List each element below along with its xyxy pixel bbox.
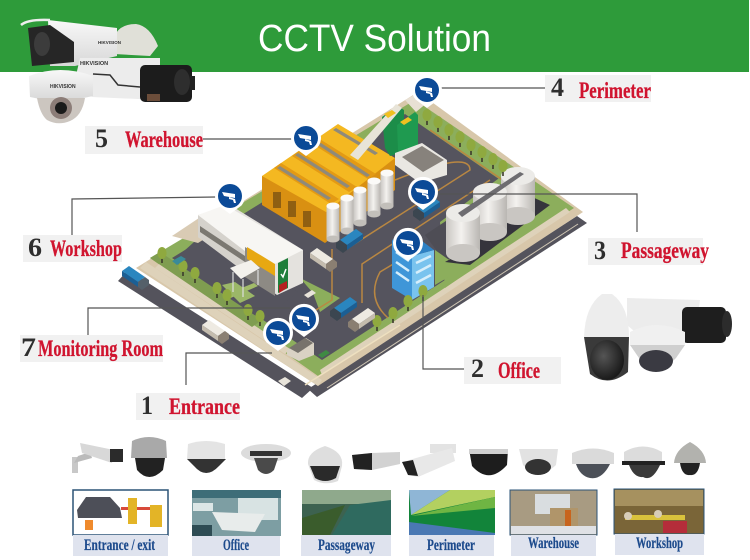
label: 4 perimeter [545, 73, 651, 103]
map pin: warehouse [291, 123, 321, 156]
box camera [75, 58, 195, 102]
scenario card: workshop [614, 489, 704, 555]
perimeter trees [157, 109, 508, 331]
label: 6 workshop: 6 [28, 233, 42, 262]
label: 6 workshop [23, 233, 122, 262]
photo [409, 490, 495, 535]
caption: Warehouse [528, 535, 579, 552]
title: CCTV Solution [258, 18, 491, 60]
label: 4 perimeter: Perimeter [579, 78, 651, 103]
camera 1 [72, 443, 123, 473]
camera 5 [308, 446, 342, 483]
map pin: passageway [408, 177, 438, 210]
scenario card: passageway [301, 490, 391, 556]
photo [73, 490, 168, 535]
PTZ camera [584, 294, 629, 381]
leader line: perimeter [441, 87, 545, 89]
box camera [627, 298, 732, 343]
leader line: warehouse [203, 138, 295, 140]
dome camera [29, 70, 93, 123]
bracket mount [114, 24, 158, 56]
gatehouse [287, 338, 314, 361]
photo [510, 490, 597, 535]
office tower [392, 232, 434, 300]
outer roads [118, 92, 587, 398]
camera 7 [402, 444, 456, 477]
label: 5 warehouse: Warehouse [125, 127, 203, 152]
utility building [395, 143, 447, 183]
header banner [0, 0, 749, 72]
map pin: entrance [263, 318, 293, 351]
label: 2 office: Office [498, 358, 540, 383]
silos [326, 170, 394, 242]
label: 1 entrance: Entrance [169, 394, 240, 419]
leader line: passageway [435, 194, 637, 232]
leader line: workshop [72, 197, 216, 235]
leader line: office [423, 295, 464, 369]
dome camera [630, 325, 685, 372]
workshop building [198, 205, 303, 296]
label: 5 warehouse: 5 [95, 124, 108, 153]
label: 7 monitoring room: Monitoring Room [38, 336, 163, 361]
label: 2 office: 2 [471, 354, 484, 383]
label: 4 perimeter: 4 [551, 73, 564, 102]
fuel tanks [445, 167, 550, 265]
map pin: office [393, 228, 423, 261]
camera 12 [674, 442, 706, 475]
label: 3 passageway [588, 236, 709, 265]
map pin: monitoring room [289, 304, 319, 337]
label: 7 monitoring room [20, 333, 163, 362]
camera 2 [131, 437, 167, 477]
caption: Passageway [318, 537, 375, 554]
photo [614, 489, 704, 534]
camera 8 [469, 449, 508, 475]
scenario card: perimeter [409, 490, 495, 556]
camera lineup [72, 437, 706, 483]
green conveyors [350, 93, 428, 160]
label: 3 passageway: Passageway [621, 238, 709, 263]
photo [192, 490, 281, 536]
camera 6 [352, 452, 400, 470]
road markings [300, 130, 520, 385]
vehicles [122, 197, 440, 386]
workshop parking lot [150, 214, 298, 327]
camera 4 [241, 444, 291, 474]
bullet camera [21, 20, 121, 66]
label: 1 entrance: 1 [141, 391, 153, 420]
camera 11 [622, 446, 665, 478]
bullet camera: HIKVISION [98, 40, 121, 45]
label: 7 monitoring room: 7 [21, 333, 36, 362]
caption: Office [223, 537, 249, 554]
label: 3 passageway: 3 [594, 236, 606, 265]
hero cameras: right [584, 294, 732, 381]
caption: Perimeter [427, 537, 475, 554]
label: 6 workshop: Workshop [50, 236, 122, 261]
scenario card: entrance [73, 490, 168, 556]
caption: Entrance / exit [84, 537, 155, 554]
leader line: monitoring room [88, 308, 290, 335]
caption: Workshop [636, 535, 683, 552]
label: 5 warehouse [85, 124, 203, 154]
label: 2 office [464, 354, 561, 384]
warehouse [262, 124, 395, 243]
camera 10 [572, 448, 614, 478]
map pin: perimeter [412, 75, 442, 108]
leader line: entrance [186, 353, 272, 385]
camera 9 [519, 449, 558, 475]
hero cameras: top left [21, 20, 195, 123]
map pin: workshop [215, 181, 245, 214]
green lawns [140, 100, 574, 386]
scenario card: office [192, 490, 281, 556]
canopy [230, 260, 260, 297]
asphalt yard [172, 114, 560, 360]
dome camera: HIKVISION [50, 84, 76, 90]
label: 1 entrance [136, 391, 240, 420]
isometric site map [118, 92, 587, 398]
photo [302, 490, 391, 535]
box camera: HIKVISION [80, 61, 108, 67]
scenario card: warehouse [510, 490, 597, 556]
camera 3 [187, 441, 226, 473]
